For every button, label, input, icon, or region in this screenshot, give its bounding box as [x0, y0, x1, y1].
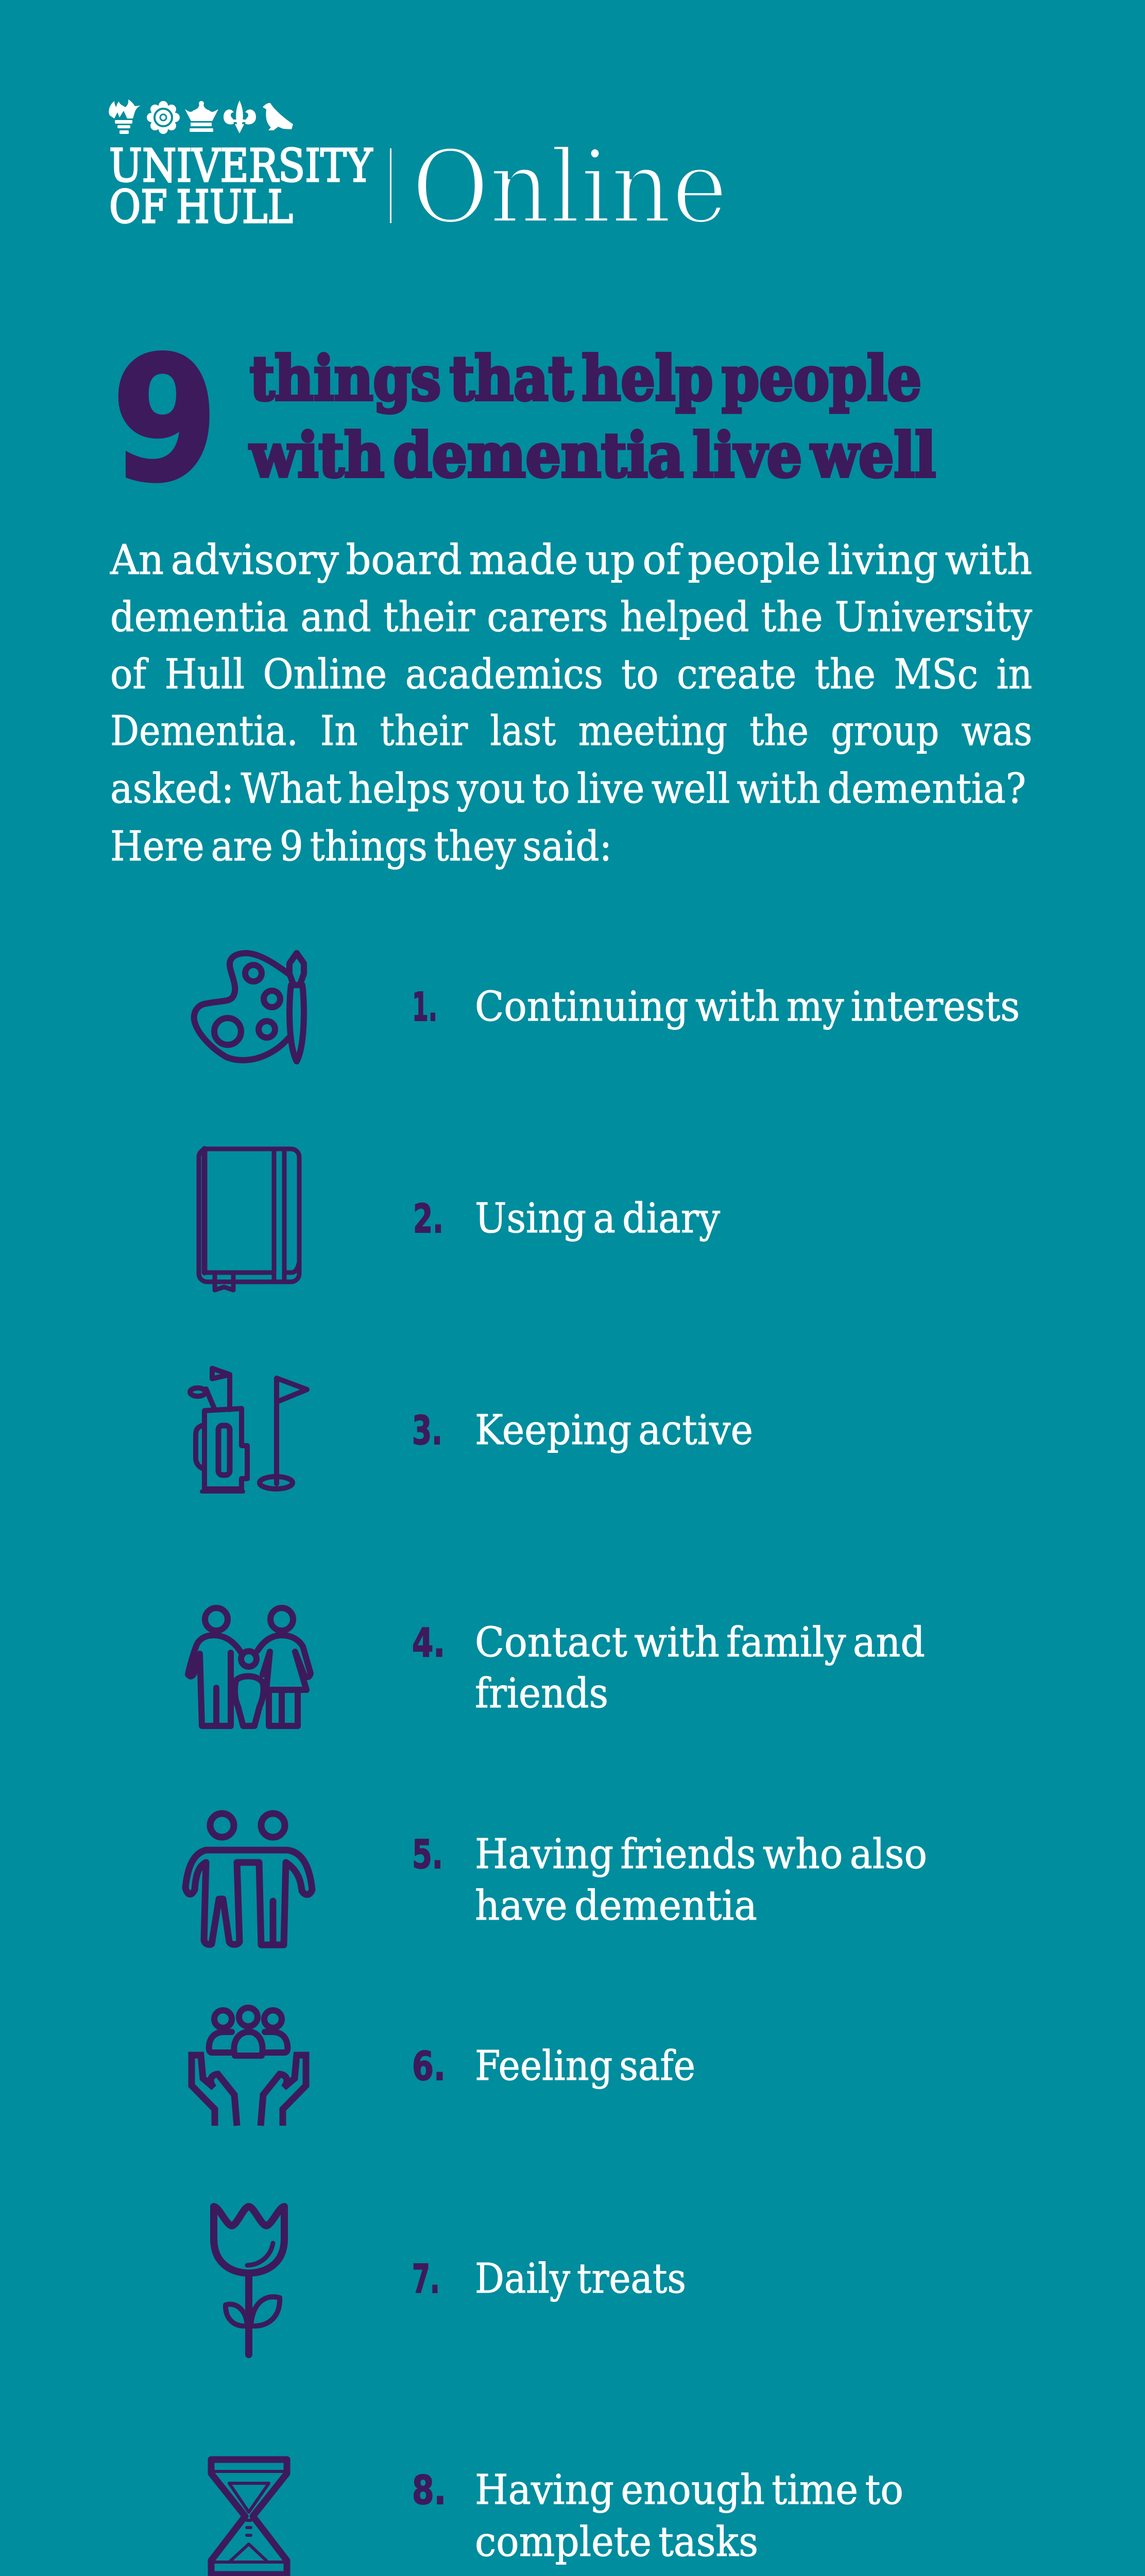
number: 4.: [412, 1620, 445, 1666]
intro paragraph: of Hull Online academics to create the MSc in: [110, 650, 1032, 698]
label: Continuing with my interests: [475, 982, 1020, 1030]
item 3: keeping active: [190, 1368, 753, 1492]
label: Contact with family and: [475, 1618, 925, 1666]
heading line 1: things that help people: [250, 343, 921, 414]
icon: notebook: [199, 1149, 299, 1290]
intro paragraph: [110, 536, 1032, 870]
item 5: having friends who also have dementia: [185, 1814, 927, 1945]
logo: University of Hull Online: [109, 99, 728, 246]
label: Keeping active: [475, 1406, 753, 1454]
icon: torch: [109, 99, 141, 134]
number: 5.: [412, 1832, 443, 1878]
Online wordmark: Online: [412, 129, 728, 246]
wordmark: UNIVERSITY: [109, 139, 373, 192]
icon: family of three: [188, 1608, 311, 1726]
item 7: daily treats: [214, 2207, 686, 2354]
item 8: having enough time to complete tasks: [211, 2460, 903, 2574]
icon: fleur-de-lis: [224, 100, 256, 133]
icon: tulip: [214, 2207, 284, 2354]
number: 7.: [412, 2257, 440, 2302]
number: 6.: [412, 2044, 446, 2090]
icon: rose: [147, 101, 180, 134]
title: [112, 320, 936, 520]
intro paragraph: An advisory board made up of people living with: [110, 536, 1032, 584]
number: 8.: [412, 2468, 446, 2514]
item 4: contact with family and friends: friends: [475, 1669, 608, 1717]
icon: bird: [263, 103, 293, 130]
item 4: contact with family and friends: [188, 1608, 925, 1726]
icon: crown: [185, 101, 218, 132]
label: Having friends who also: [475, 1830, 927, 1878]
label: Having enough time to: [475, 2466, 903, 2514]
big numeral 9: 9: [112, 320, 218, 520]
label: Feeling safe: [475, 2042, 695, 2090]
intro paragraph: Dementia. In their last meeting the group was: [110, 707, 1032, 755]
icon: hourglass: [211, 2460, 287, 2574]
item 8: having enough time to complete tasks: complete tasks: [475, 2518, 758, 2566]
item 6: feeling safe: [192, 2008, 695, 2126]
intro paragraph: Here are 9 things they said:: [110, 822, 612, 870]
icon: two friends: [185, 1814, 312, 1945]
item 1: continuing with my interests: [194, 953, 1020, 1061]
icon: golf bag and flag: [190, 1368, 307, 1492]
label: Using a diary: [475, 1194, 720, 1242]
number: 2.: [413, 1196, 443, 1242]
number: 3.: [412, 1408, 442, 1454]
intro paragraph: dementia and their carers helped the University: [110, 593, 1032, 641]
item 5: having friends who also have dementia: have dementia: [475, 1882, 757, 1929]
crest icons: [109, 99, 293, 134]
number: 1.: [412, 985, 437, 1030]
intro paragraph: asked: What helps you to live well with dementia?: [110, 765, 1026, 812]
heading line 2: with dementia live well: [249, 419, 936, 491]
icon: paint palette and brush: [194, 953, 304, 1061]
label: Daily treats: [475, 2255, 686, 2302]
wordmark second line: OF HULL: [109, 180, 293, 233]
icon: hands holding people: [192, 2008, 306, 2126]
item 2: using a diary: [199, 1149, 720, 1290]
